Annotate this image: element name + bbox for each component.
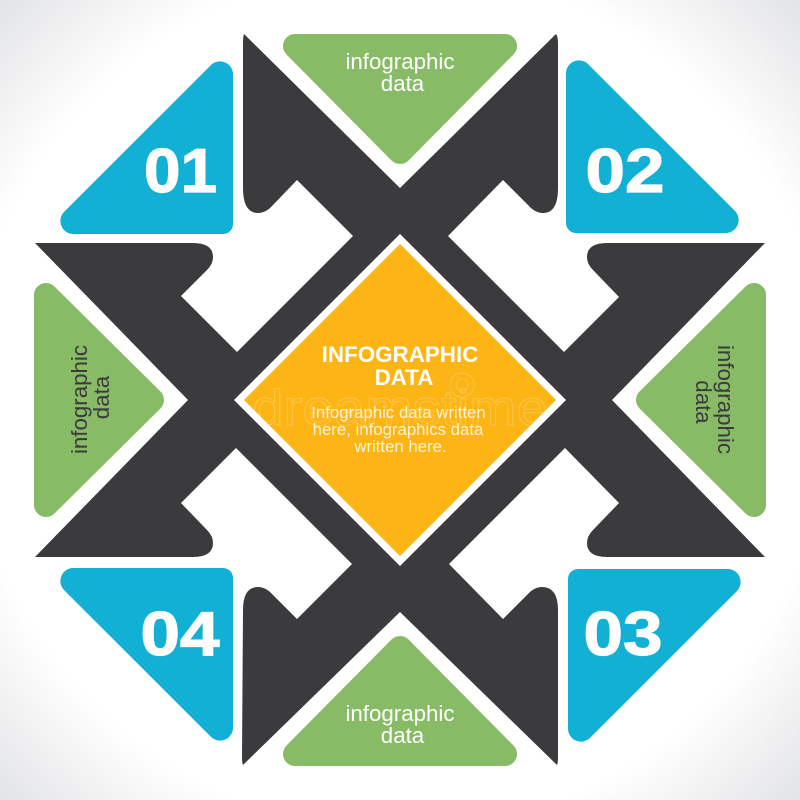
centre diamond border <box>234 234 566 566</box>
panel: 02 <box>566 60 739 233</box>
centre body text: here, infographics data <box>313 420 484 439</box>
panel: left green: data <box>89 375 114 419</box>
panel: 02: 02 <box>586 137 664 206</box>
panel: 04 <box>60 568 233 741</box>
panel: left green: infographic <box>67 345 92 454</box>
panel: 03 <box>568 569 741 742</box>
panel: top green: infographic <box>345 49 455 74</box>
panel: right green: data <box>691 380 716 424</box>
centre heading second line: DATA <box>375 365 433 390</box>
panel: 04: 04 <box>140 600 220 669</box>
panel: 01 <box>60 61 233 234</box>
centre heading: INFOGRAPHIC <box>322 342 478 367</box>
panel: top green <box>295 46 505 152</box>
centre body text: Infographic data written <box>311 403 486 422</box>
panel: centre diamond <box>244 244 556 556</box>
panel: 01: 01 <box>144 137 217 206</box>
panel: right green <box>648 295 754 505</box>
panel: bottom green: data <box>381 723 425 748</box>
panel: top green: data <box>381 71 425 96</box>
watermark: dreamstime <box>252 380 548 436</box>
panel: bottom green: infographic <box>345 701 455 726</box>
centre body text: written here. <box>353 437 447 456</box>
panel: 03: 03 <box>584 600 662 669</box>
panel: left green <box>46 295 152 505</box>
panel: right green: infographic <box>713 345 738 454</box>
panel: bottom green <box>295 648 505 754</box>
